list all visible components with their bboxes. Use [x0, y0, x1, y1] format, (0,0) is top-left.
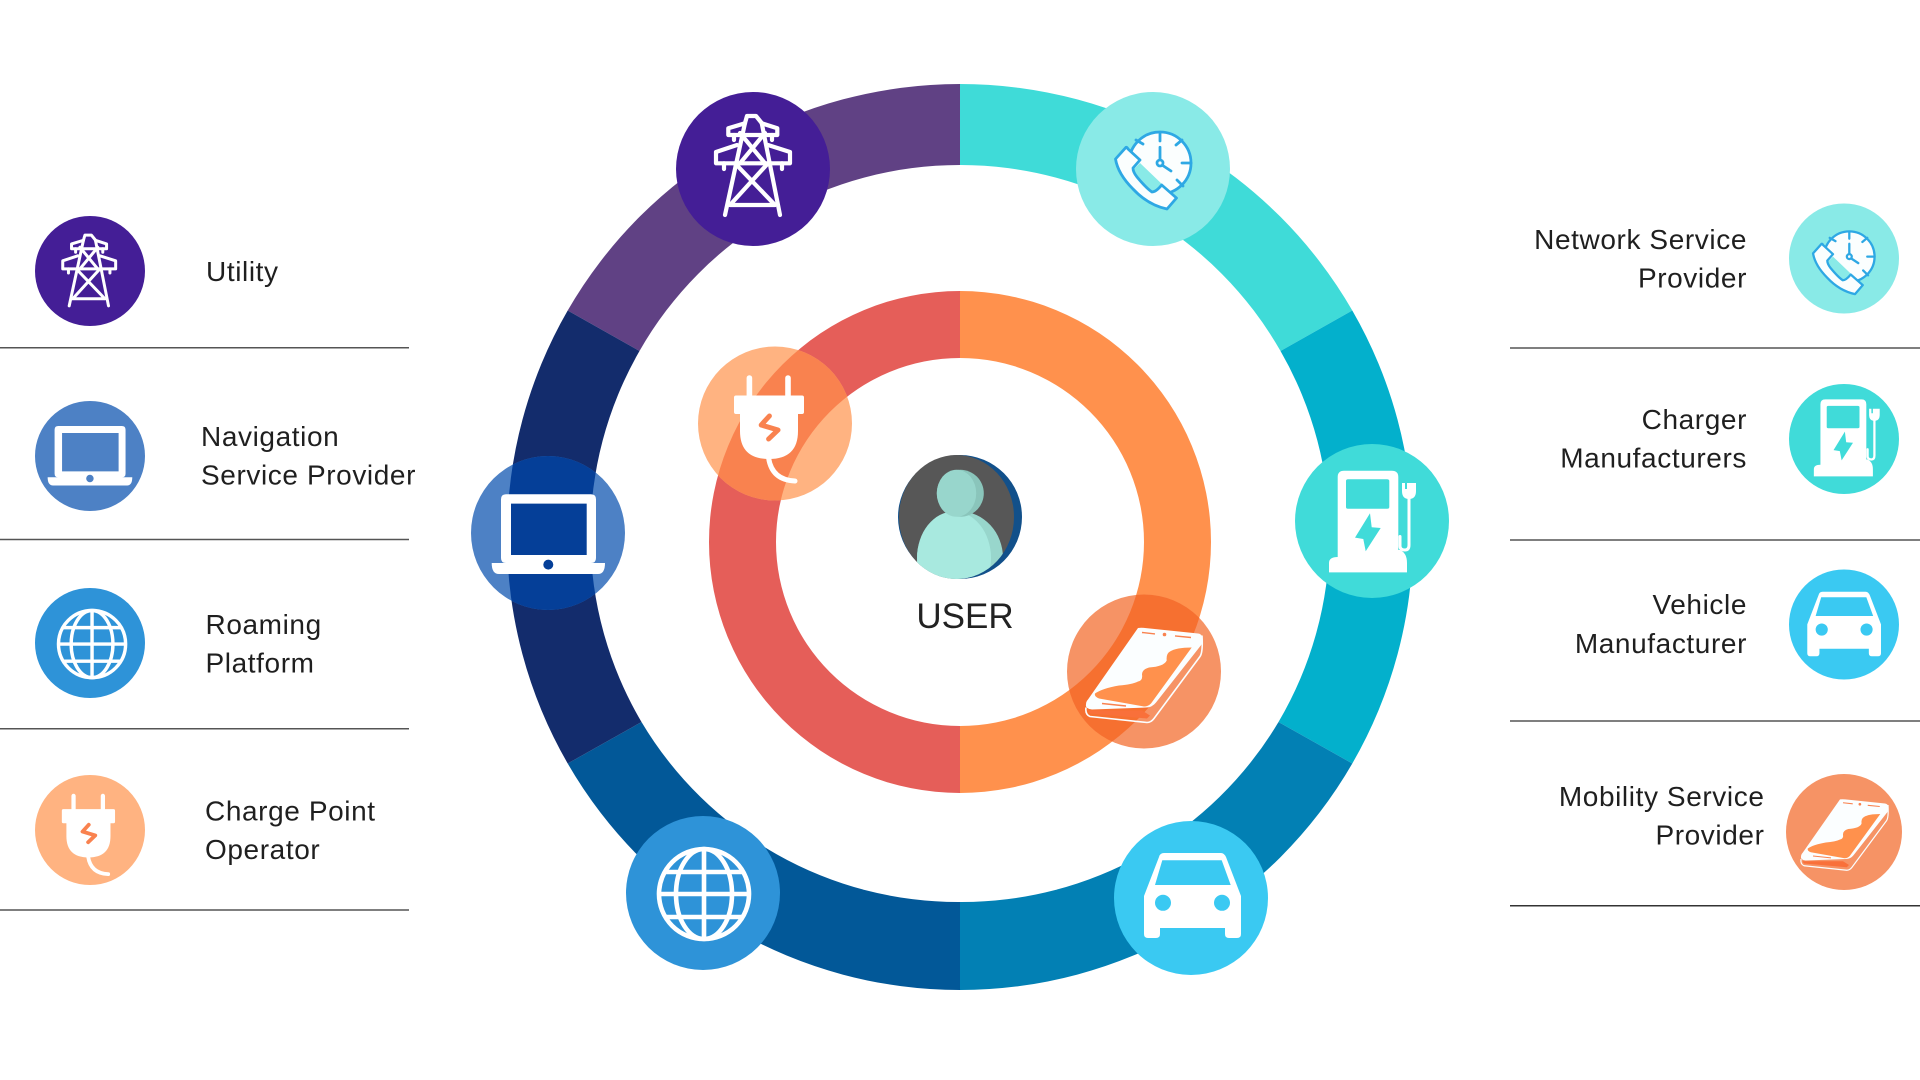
legend row: Vehicle Manufacturer: [1575, 570, 1899, 680]
panel: left legend: [35, 216, 416, 885]
legend row: Roaming Platform: Roaming: [206, 609, 322, 640]
icon: network phone and clock on ring: [1076, 92, 1230, 246]
panel: inner ring: [709, 291, 1211, 793]
ring segment: navigation service provider: [507, 310, 642, 764]
icon: charger on ring: [1295, 444, 1449, 598]
icon: car on ring: [1114, 821, 1268, 975]
icon: plug on inner ring: [698, 346, 852, 500]
inner ring: right half: [960, 291, 1211, 793]
icon: laptop on ring: [471, 456, 625, 610]
legend row: Roaming Platform: Platform: [206, 648, 315, 678]
ring segment: network service provider: [960, 84, 1352, 351]
legend row: Charge Point Operator: [35, 775, 376, 885]
inner ring: left half: [709, 291, 960, 793]
legend row: Charger Manufacturers: [1560, 384, 1899, 494]
icon: phone on inner ring: [1067, 594, 1221, 748]
legend row: Network Service Provider: Network Service: [1534, 224, 1747, 255]
legend row: Vehicle Manufacturer: Manufacturer: [1575, 628, 1747, 659]
ring segment: roaming platform: [568, 722, 960, 990]
ring segment: utility: [568, 84, 960, 351]
legend row: Navigation Service Provider: Navigation: [201, 421, 339, 452]
legend row: Mobility Service Provider: Mobility Service: [1559, 781, 1764, 812]
icon: user avatar: [898, 455, 1022, 579]
legend row: Charger Manufacturers: Charger: [1642, 404, 1747, 435]
legend row: Charger Manufacturers: Manufacturers: [1560, 442, 1747, 474]
legend row: Vehicle Manufacturer: Vehicle: [1652, 589, 1747, 620]
legend row: Utility: Utility: [206, 256, 279, 287]
legend row: Charge Point Operator: Charge Point: [205, 796, 376, 826]
panel: outer ring: [507, 84, 1413, 990]
legend row: Mobility Service Provider: Provider: [1655, 820, 1764, 850]
legend row: Mobility Service Provider: [1559, 774, 1902, 890]
legend row: Network Service Provider: Provider: [1638, 262, 1747, 294]
legend row: Navigation Service Provider: Service Provider: [201, 460, 416, 490]
legend row: Roaming Platform: [35, 588, 322, 698]
legend row: Utility: [35, 216, 279, 326]
icon: globe on ring: [626, 816, 780, 970]
legend row: Charge Point Operator: Operator: [205, 834, 320, 865]
legend row: Network Service Provider: [1534, 204, 1899, 314]
legend row: Navigation Service Provider: [35, 401, 416, 511]
panel: right legend: [1534, 204, 1902, 890]
icon: utility tower on ring: [676, 92, 830, 246]
label: USER: USER: [916, 597, 1014, 636]
ring segment: charger manufacturers: [1278, 310, 1413, 764]
ring segment: vehicle manufacturer: [960, 722, 1352, 990]
